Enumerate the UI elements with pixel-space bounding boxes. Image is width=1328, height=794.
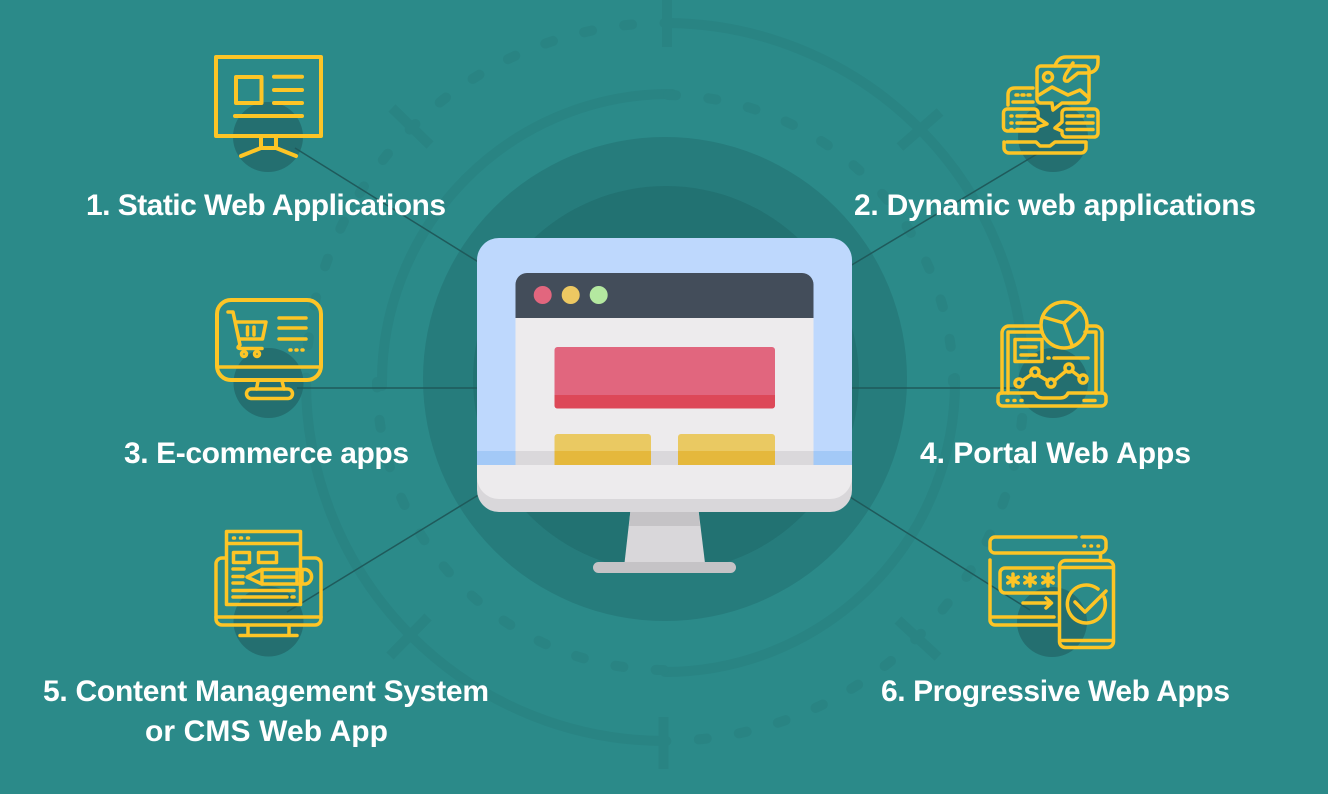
label 3: 3. E-commerce apps [124,437,409,470]
browser header [516,273,814,318]
label 5: or CMS Web App [145,715,388,748]
label 2: 2. Dynamic web applications [854,189,1256,222]
label 5: 5. Content Management System [43,675,489,708]
icon backing circles [233,102,1088,657]
stand base [593,562,736,573]
label 5 [43,675,489,748]
monitor chin [477,465,852,499]
window buttons [534,286,608,304]
background target rings [306,0,1024,769]
browser shadow strip [516,451,814,465]
label 6: 6. Progressive Web Apps [881,675,1230,708]
concentric discs [423,137,907,621]
label 1: 1. Static Web Applications [86,189,446,222]
connector lines [287,148,1037,612]
icon: e-commerce monitor with cart [217,300,321,398]
icon: dynamic chat laptop [1003,57,1098,153]
browser body [516,318,814,465]
label 4: 4. Portal Web Apps [920,437,1191,470]
yellow blocks [554,434,775,465]
central monitor [477,238,852,573]
stand shadow [629,510,700,526]
monitor chin shadow [477,465,852,512]
icon: CMS document on monitor [216,532,321,636]
red banner [554,347,775,408]
icon: progressive web app window and phone [990,537,1114,648]
monitor screen frame [477,238,852,465]
screen shadow strip [477,451,852,465]
icon: static web monitor [216,57,321,156]
monitor stand [624,510,705,563]
icon: portal laptop with pie chart [998,302,1106,406]
